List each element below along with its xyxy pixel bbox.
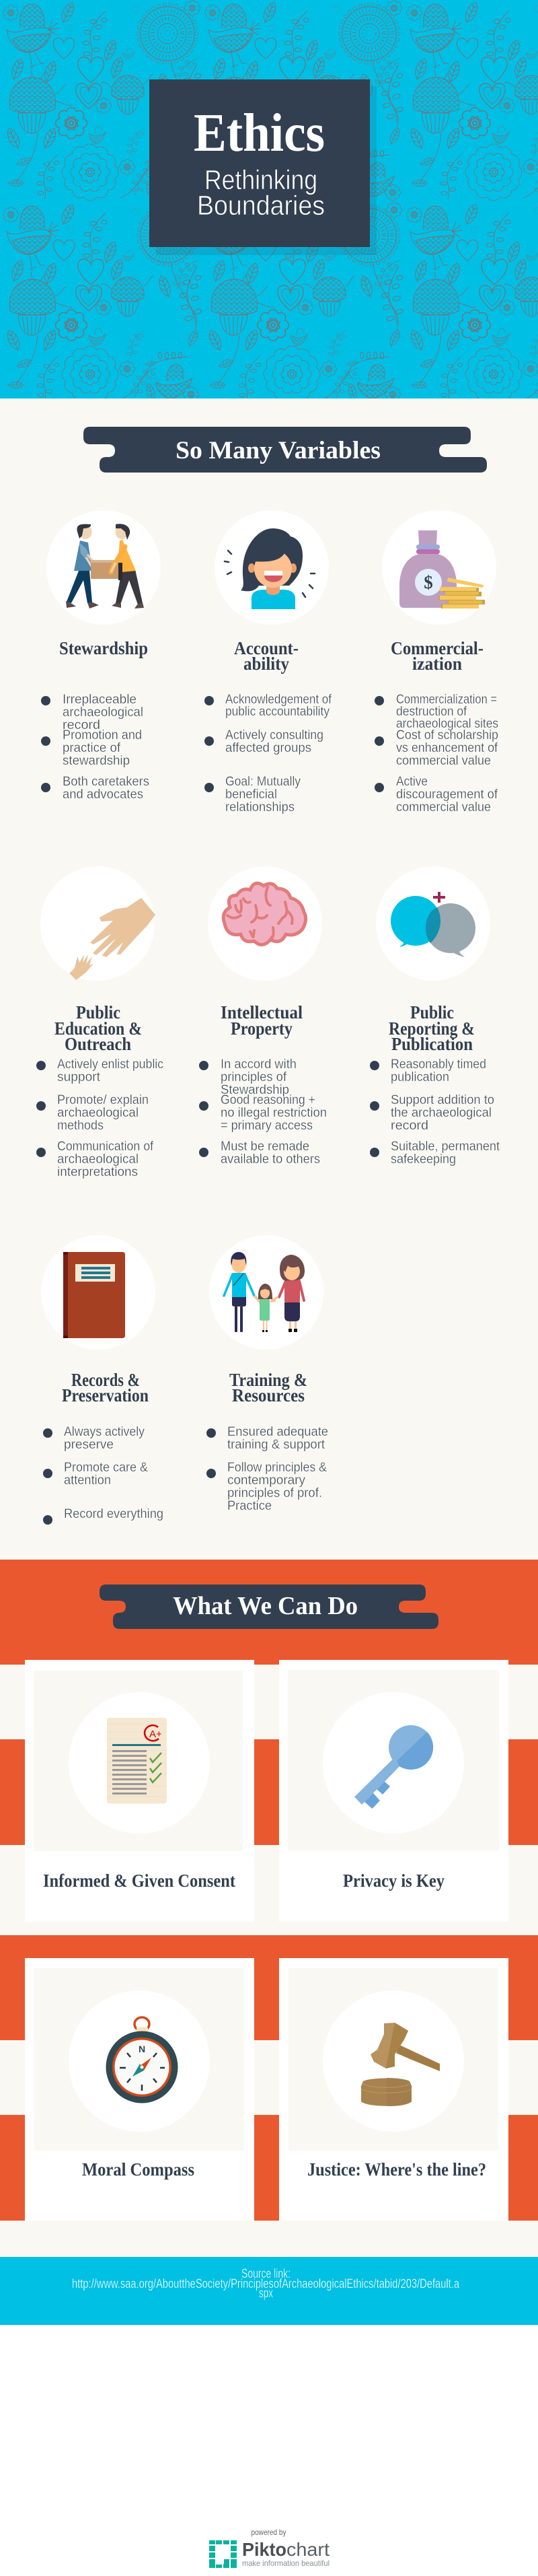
heading: Outreach: [65, 1034, 131, 1054]
panel: Accountability: [204, 510, 332, 814]
bullet list: [375, 693, 498, 814]
bullet list: no illegal restriction: [221, 1106, 327, 1120]
panel: Intellectual Property: [199, 866, 327, 1167]
bullet list: attention: [64, 1473, 111, 1488]
heading: [54, 1002, 142, 1054]
bullet list: the archaeological: [391, 1106, 492, 1120]
card: Informed & Given Consent: [25, 1660, 254, 1922]
Piktochart credit: make information beautiful: [242, 2558, 330, 2568]
logo mark: [209, 2540, 237, 2568]
bullet list: Record everything: [64, 1507, 163, 1521]
heading: Property: [231, 1018, 293, 1039]
heading: Commercial-: [391, 638, 484, 658]
bullet list: Promote/ explain: [57, 1093, 149, 1107]
header banner with floral pattern: [0, 0, 538, 398]
label: Justice: Where's the line?: [307, 2159, 486, 2180]
panel: Records & Preservation: [41, 1235, 163, 1525]
bullet list: discouragement of: [396, 788, 498, 802]
bullet list: [43, 1425, 163, 1525]
icon: brain: [223, 883, 306, 945]
panel: Public Education & Outreach: [36, 866, 163, 1179]
icon: reaching hands: [70, 898, 155, 980]
bullet list: [199, 1057, 327, 1167]
heading: Training &: [229, 1370, 307, 1390]
bullet list: and advocates: [63, 788, 143, 802]
bullet list: affected groups: [225, 741, 311, 755]
bullet list: In accord with: [221, 1057, 297, 1072]
bullet list: archaeological: [57, 1152, 139, 1167]
bullet list: Follow principles &: [227, 1461, 327, 1475]
bullet list: practice of: [63, 741, 121, 755]
bullet list: beneficial: [225, 788, 277, 802]
bullet list: Irreplaceable: [63, 693, 137, 707]
bullet list: Actively consulting: [225, 728, 323, 742]
bullet list: archaeological sites: [396, 717, 498, 731]
bullet list: Reasonably timed: [391, 1057, 486, 1072]
bullet list: Promotion and: [63, 728, 142, 742]
bullet list: destruction of: [396, 705, 467, 719]
icon: smiling woman: [225, 528, 315, 609]
bullet list: principles of prof.: [227, 1486, 322, 1500]
panel: Training & Resources: [206, 1235, 328, 1513]
bullet list: record: [391, 1119, 428, 1133]
bullet list: Support addition to: [391, 1093, 494, 1107]
page background: [0, 398, 538, 2257]
bullet list: vs enhancement of: [396, 741, 498, 755]
title card shadow: [156, 86, 377, 255]
bullet list: Always actively: [64, 1425, 145, 1439]
bullet list: stewardship: [63, 754, 130, 768]
icon: money bag and coins: $: [424, 572, 433, 592]
bullet list: commercial value: [396, 800, 491, 814]
section heading: So Many Variables: [83, 427, 487, 473]
bullet list: preserve: [64, 1438, 114, 1452]
title: Ethics: [194, 104, 325, 163]
bullet list: Goal: Mutually: [225, 775, 301, 789]
bullet list: [36, 1057, 163, 1179]
panel: Commercialization: [375, 510, 498, 814]
bullet list: archaeological: [63, 705, 143, 720]
bullet list: commercial value: [396, 754, 491, 768]
bullet list: Actively enlist public: [57, 1057, 163, 1072]
heading: Intellectual: [221, 1002, 303, 1022]
bullet list: Commercialization =: [396, 693, 497, 707]
bullet list: methods: [57, 1119, 104, 1133]
section heading: What We Can Do: [100, 1585, 438, 1629]
card: Moral Compass: [25, 1958, 254, 2221]
bullet list: Suitable, permanent: [391, 1140, 500, 1154]
panel: Stewardship: [41, 510, 161, 802]
heading: ization: [412, 654, 462, 674]
heading: Publication: [391, 1034, 473, 1054]
heading: [221, 1002, 303, 1039]
Piktochart credit: powered by: [252, 2528, 286, 2537]
bullet list: archaeological: [57, 1106, 139, 1120]
heading: [229, 1370, 307, 1405]
icon: compass: [106, 2017, 178, 2103]
icon: compass: N: [139, 2044, 145, 2054]
Piktochart credit: Pikto: [242, 2539, 286, 2560]
Piktochart credit: [209, 2528, 330, 2568]
heading: [62, 1370, 149, 1405]
icon: two people carrying a box: [66, 524, 144, 608]
label: Informed & Given Consent: [43, 1871, 235, 1891]
bullet list: [370, 1057, 500, 1167]
section heading: So Many Variables: So Many Variables: [176, 437, 381, 464]
title card: [149, 79, 370, 247]
heading: Resources: [232, 1385, 305, 1405]
bullet list: Good reasoning +: [221, 1093, 315, 1107]
Piktochart credit: chart: [286, 2539, 330, 2560]
heading: Records &: [71, 1370, 140, 1390]
panel: Public Reporting & Publication: [370, 866, 500, 1167]
bullet list: [206, 1425, 328, 1513]
label: Privacy is Key: [343, 1871, 445, 1891]
heading: Reporting &: [389, 1018, 475, 1039]
bullet list: Both caretakers: [63, 775, 149, 789]
bullet list: safekeeping: [391, 1152, 456, 1167]
heading: Public: [410, 1002, 454, 1022]
section heading: What We Can Do: What We Can Do: [173, 1592, 358, 1620]
icon: family: [224, 1252, 305, 1332]
subtitle: [197, 164, 325, 221]
icon: book: [63, 1252, 125, 1338]
heading: [234, 638, 299, 674]
heading: Preservation: [62, 1385, 149, 1405]
bullet list: [204, 693, 332, 814]
bullet list: [41, 693, 149, 802]
heading: [391, 638, 484, 674]
orange background bands: [0, 1560, 538, 2221]
subtitle: Rethinking: [204, 164, 317, 195]
bullet list: Cost of scholarship: [396, 728, 498, 742]
bullet list: relationships: [225, 800, 295, 814]
bullet list: Ensured adequate: [227, 1425, 328, 1439]
label: Moral Compass: [82, 2159, 194, 2180]
bullet list: Acknowledgement of: [225, 693, 332, 707]
bullet list: Stewardship: [221, 1083, 289, 1097]
bullet list: support: [57, 1070, 101, 1084]
bullet list: Promote care &: [64, 1461, 148, 1475]
heading: ability: [243, 654, 289, 674]
bullet list: interpretations: [57, 1165, 138, 1179]
heading: [389, 1002, 475, 1054]
icon: gavel: [361, 2023, 440, 2106]
bullet list: available to others: [221, 1152, 320, 1167]
bullet list: public accountability: [225, 705, 330, 719]
icon: overlapping speech bubbles: [391, 892, 475, 957]
source link band: [0, 2257, 538, 2325]
icon: money bag and coins: [399, 530, 485, 608]
bullet list: Practice: [227, 1499, 272, 1513]
bullet list: record: [63, 718, 100, 732]
bullet list: contemporary: [227, 1473, 305, 1488]
source link band: spx: [259, 2287, 273, 2301]
bullet list: Communication of: [57, 1140, 154, 1154]
subtitle: Boundaries: [197, 190, 325, 221]
bullet list: Active: [396, 775, 428, 789]
icon: graded document: [107, 1718, 167, 1804]
bullet list: publication: [391, 1070, 449, 1084]
source link band: Source link:: [241, 2267, 291, 2281]
bullet list: Must be remade: [221, 1140, 309, 1154]
bullet list: = primary access: [221, 1119, 313, 1133]
card: Privacy is Key: [279, 1660, 508, 1922]
icon: graded document: A+: [149, 1729, 162, 1740]
bullet list: training & support: [227, 1438, 325, 1452]
heading: Education &: [54, 1018, 142, 1039]
card: Justice: [279, 1958, 508, 2221]
icon: key: [354, 1725, 433, 1809]
heading: Account-: [234, 638, 299, 658]
heading: Public: [76, 1002, 120, 1022]
heading: Stewardship: [59, 638, 148, 658]
bullet list: principles of: [221, 1070, 287, 1084]
